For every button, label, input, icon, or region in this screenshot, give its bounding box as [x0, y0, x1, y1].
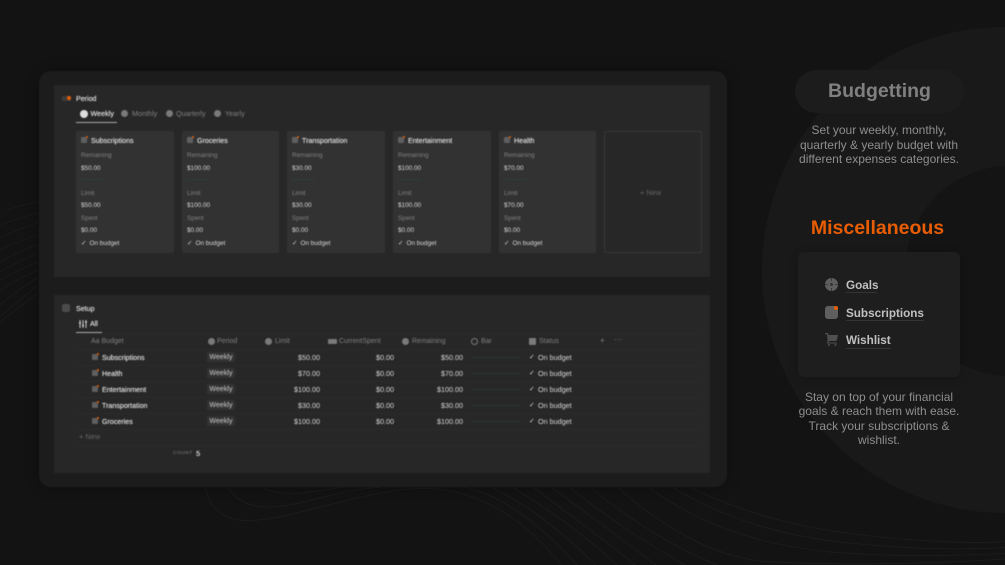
item: goals: Goals	[846, 279, 878, 292]
heading: miscellaneous: Miscellaneous	[811, 217, 944, 239]
heading: setup: Setup	[76, 304, 95, 312]
card: entertainment: Remaining	[398, 152, 429, 159]
table header: Period	[217, 338, 237, 344]
table: count footer	[172, 449, 201, 458]
icon: setup	[62, 304, 70, 312]
card: transportation: Limit	[292, 190, 306, 196]
tabs: period views	[76, 109, 245, 124]
table header	[90, 335, 622, 346]
card: groceries: Remaining	[187, 152, 218, 159]
table row: groceries: $0.00	[376, 416, 394, 426]
table header: ···	[614, 335, 622, 344]
card: subscriptions: $0.00	[81, 227, 97, 234]
table row: groceries: On budget	[538, 416, 572, 426]
card: subscriptions: Remaining	[81, 152, 112, 159]
text: miscellaneous description: Stay on top of your financial	[805, 390, 953, 404]
table header: CurrentSpent	[339, 338, 381, 344]
table header: Remaining	[412, 338, 445, 344]
card: health: $0.00	[504, 227, 520, 234]
table: add new row: + New	[79, 432, 100, 441]
table row: groceries	[92, 416, 572, 426]
table row: subscriptions: Subscriptions	[102, 354, 145, 362]
tabs: period views: Yearly	[225, 109, 245, 118]
text: budgetting description: different expenses categories.	[799, 152, 959, 166]
table row: subscriptions	[92, 352, 572, 362]
panel: setup table	[54, 295, 710, 473]
card: entertainment: Entertainment	[408, 137, 452, 145]
tabs: period views: Weekly	[90, 109, 114, 118]
table: count footer: 5	[196, 449, 200, 458]
card: transportation: Transportation	[302, 137, 347, 145]
card: health: Health	[514, 137, 535, 145]
table header: Status	[539, 338, 559, 344]
card: transportation: ✓	[292, 240, 297, 247]
tabs: period views: Monthly	[132, 109, 157, 118]
card: entertainment: Limit	[398, 190, 412, 196]
table row: subscriptions: Weekly	[209, 353, 233, 361]
item: wishlist	[825, 333, 891, 349]
table row: entertainment	[92, 384, 572, 394]
card: groceries: On budget	[196, 240, 225, 247]
tabs: period views: Quarterly	[176, 109, 206, 118]
text: budgetting description	[799, 123, 959, 166]
table row: transportation: On budget	[538, 400, 572, 410]
card: subscriptions: $50.00	[81, 202, 101, 209]
card: entertainment: ✓	[398, 240, 403, 247]
card: transportation: On budget	[300, 240, 330, 247]
table row: entertainment: $0.00	[376, 384, 394, 394]
card: groceries: $100.00	[187, 202, 210, 209]
card: add new	[604, 131, 702, 253]
item: subscriptions: Subscriptions	[846, 306, 924, 320]
card: entertainment: $0.00	[398, 227, 414, 234]
table row: transportation: Transportation	[102, 402, 147, 410]
table row: groceries: ✓	[529, 418, 535, 424]
card: entertainment: Spent	[398, 215, 415, 222]
table row: health: Health	[102, 370, 123, 378]
table row: subscriptions: $0.00	[376, 352, 394, 362]
card: subscriptions: Subscriptions	[91, 137, 134, 145]
tab: all	[76, 319, 102, 334]
item: wishlist: Wishlist	[846, 334, 891, 347]
table row: health: ✓	[529, 370, 535, 376]
card: health	[499, 131, 596, 253]
heading: period: Period	[76, 94, 97, 102]
table row: health: Weekly	[209, 369, 233, 377]
card: health: Remaining	[504, 152, 535, 159]
table row: subscriptions: On budget	[538, 352, 572, 362]
table row: groceries: $100.00	[437, 416, 463, 426]
text: miscellaneous description	[799, 390, 959, 447]
card: transportation: $30.00	[292, 202, 312, 209]
panel: period	[54, 85, 710, 277]
pill: budgetting heading	[795, 70, 964, 113]
text: budgetting description: Set your weekly, monthly,	[812, 123, 946, 137]
table row: entertainment: ✓	[529, 386, 535, 392]
icon: period	[62, 96, 71, 101]
table row: transportation: $30.00	[298, 400, 320, 410]
app window frame	[39, 71, 727, 487]
text: miscellaneous description: wishlist.	[858, 433, 900, 447]
card: add new: + New	[640, 188, 661, 197]
card: subscriptions: $50.00	[81, 165, 101, 172]
table row: transportation: ✓	[529, 402, 535, 408]
table row: transportation: Weekly	[209, 401, 233, 409]
card: entertainment: $100.00	[398, 165, 421, 172]
table row: entertainment: Entertainment	[102, 386, 146, 394]
card: groceries: Limit	[187, 190, 200, 196]
card: subscriptions: Limit	[81, 190, 94, 196]
card: subscriptions: Spent	[81, 215, 98, 222]
table row: health: On budget	[538, 368, 572, 378]
card: groceries: ✓	[187, 240, 192, 247]
card: transportation	[287, 131, 385, 253]
table row: groceries: Groceries	[102, 418, 133, 426]
card: health: Limit	[504, 190, 518, 196]
card: transportation: Remaining	[292, 152, 323, 159]
card: health: Spent	[504, 215, 521, 222]
text: budgetting description: quarterly & yearly budget with	[800, 138, 958, 152]
card: entertainment: On budget	[406, 240, 436, 247]
text: miscellaneous description: goals & reach them with ease.	[799, 404, 959, 418]
text: miscellaneous description: Track your subscriptions &	[809, 419, 949, 433]
card: groceries: Groceries	[197, 137, 228, 145]
card: health: $70.00	[504, 202, 524, 209]
table row: health	[92, 368, 572, 378]
card: transportation: $0.00	[292, 227, 308, 234]
table header: +	[600, 336, 605, 345]
card: groceries: $100.00	[187, 165, 210, 172]
table header: Bar	[481, 338, 492, 344]
table row: groceries: $100.00	[294, 416, 320, 426]
table row: entertainment: $100.00	[437, 384, 463, 394]
card: subscriptions: On budget	[90, 240, 119, 247]
item: goals	[825, 278, 878, 293]
card: transportation: $30.00	[292, 165, 312, 172]
table row: transportation	[92, 400, 572, 410]
card: health: On budget	[512, 240, 542, 247]
table row: transportation: $0.00	[376, 400, 394, 410]
panel: miscellaneous links	[798, 252, 960, 377]
card: transportation: Spent	[292, 215, 309, 222]
table row: health: $70.00	[298, 368, 320, 378]
card: entertainment: $100.00	[398, 202, 421, 209]
card: subscriptions	[76, 131, 174, 253]
table row: subscriptions: $50.00	[298, 352, 320, 362]
card: health: ✓	[504, 240, 509, 247]
table header: Limit	[275, 338, 290, 344]
card: groceries	[182, 131, 279, 253]
table row: entertainment: On budget	[538, 384, 572, 394]
table row: entertainment: $100.00	[294, 384, 320, 394]
card: groceries: Spent	[187, 215, 204, 222]
table row: subscriptions: $50.00	[441, 352, 463, 362]
table row: health: $70.00	[441, 368, 463, 378]
card: entertainment	[393, 131, 491, 253]
table row: groceries: Weekly	[209, 417, 233, 425]
table: count footer: COUNT	[173, 451, 193, 456]
card: health: $70.00	[504, 165, 524, 172]
table header: Aa Budget	[91, 338, 124, 344]
card: groceries: $0.00	[187, 227, 203, 234]
tab: all: All	[90, 319, 98, 328]
table row: subscriptions: ✓	[529, 354, 535, 360]
table row: entertainment: Weekly	[209, 385, 233, 393]
table row: health: $0.00	[376, 368, 394, 378]
card: subscriptions: ✓	[81, 240, 86, 247]
pill: budgetting heading: Budgetting	[828, 80, 931, 102]
table row: transportation: $30.00	[441, 400, 463, 410]
